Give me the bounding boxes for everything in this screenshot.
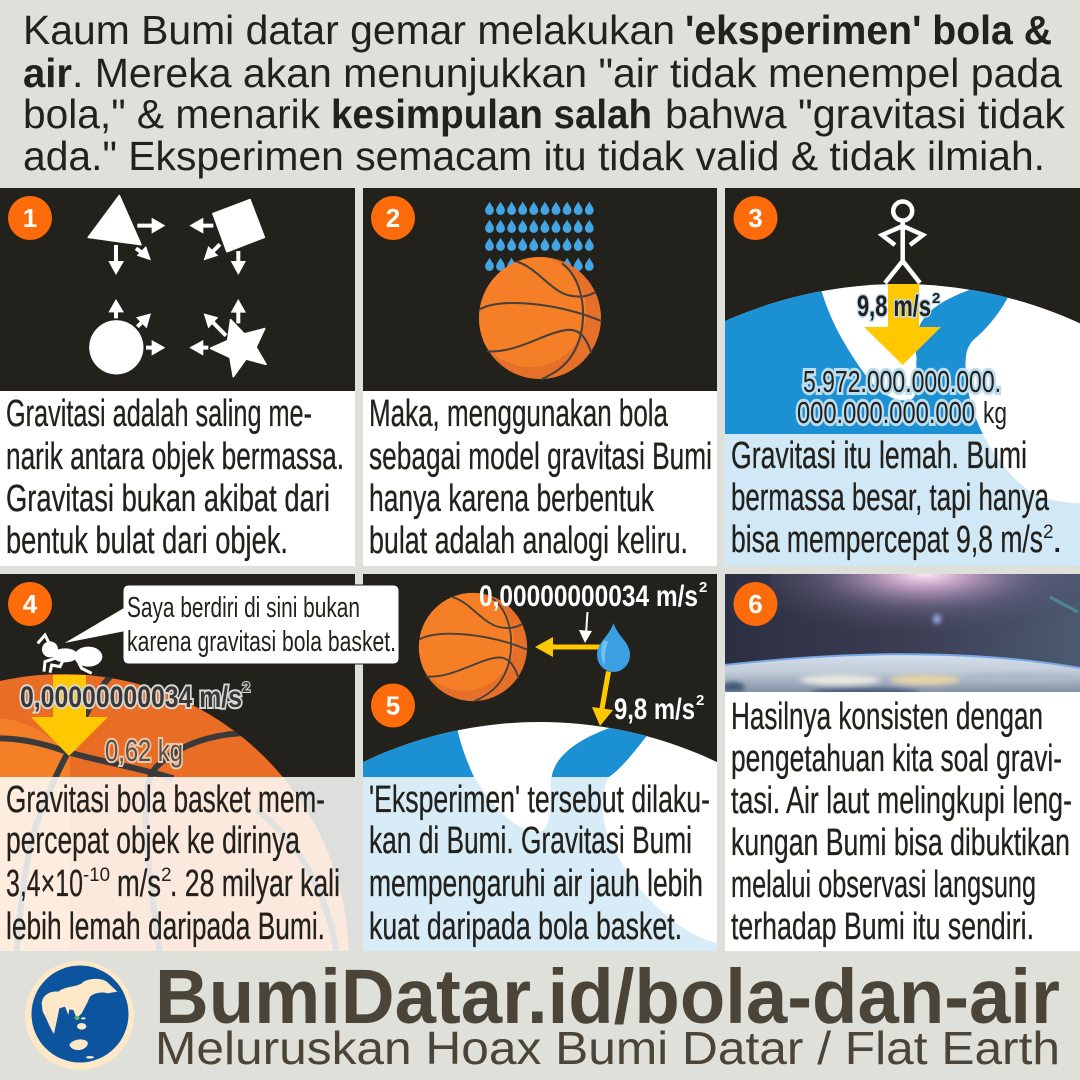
panel 4: ant on basketball xyxy=(0,574,399,960)
panel 6: photo of earth from space xyxy=(721,574,1080,951)
text block 6 xyxy=(731,696,1072,948)
title xyxy=(23,7,1065,179)
overlay xyxy=(725,434,1080,566)
title: bahwa "gravitasi tidak xyxy=(665,91,1065,137)
earth illustration xyxy=(363,715,717,955)
label: earth mass: 000.000.000.000 xyxy=(797,395,975,430)
arrow: toward earth xyxy=(592,671,613,726)
footer url: BumiDatar.id/bola-dan-air xyxy=(155,954,1060,1040)
text block 1 xyxy=(6,393,344,562)
label: earth mass: 5.972.000.000.000. xyxy=(803,364,1001,399)
callout: ant speech bubble xyxy=(62,585,399,664)
text block 4: -10 xyxy=(83,865,110,886)
text block 1: Gravitasi bukan akibat dari xyxy=(6,478,330,520)
label: earth mass xyxy=(797,364,1007,430)
title: . Mereka akan menunjukkan "air tidak menempel pada xyxy=(72,50,1062,96)
overlay xyxy=(0,777,355,951)
label: 9,8 m/s2: 2 xyxy=(932,290,940,307)
badge 6 xyxy=(734,582,778,626)
footer tagline: Meluruskan Hoax Bumi Datar / Flat Earth xyxy=(155,1022,1060,1074)
panel 3: earth gravity xyxy=(725,188,1080,570)
text block 2: hanya karena berbentuk xyxy=(369,478,655,520)
text block 4 xyxy=(6,779,340,948)
text block 1: narik antara objek bermassa. xyxy=(6,436,344,478)
text block 5: 'Eksperimen' tersebut dilaku- xyxy=(369,779,710,821)
badge 4: 4 xyxy=(23,589,38,619)
label: earth acceleration: 2 xyxy=(696,692,704,709)
label: earth acceleration: 9,8 m/s xyxy=(614,693,695,726)
badge 6: 6 xyxy=(748,589,763,619)
badge 1: 1 xyxy=(23,203,37,233)
text block 5: kuat daripada bola basket. xyxy=(369,906,682,948)
title: ada." Eksperimen semacam itu tidak valid & tidak ilmiah. xyxy=(23,133,1045,179)
label: ball acceleration: 0,00000000034 m/s xyxy=(479,580,698,613)
text block 3: 2 xyxy=(1043,522,1054,543)
text block 2: bulat adalah analogi keliru. xyxy=(369,520,688,562)
label: earth mass: kg xyxy=(983,395,1007,430)
badge 3: 3 xyxy=(748,203,763,233)
panel 5: drop between ball and earth xyxy=(363,574,717,955)
badge 3 xyxy=(734,196,778,240)
panel 1: shapes and gravity xyxy=(0,188,355,566)
arrow: toward ball xyxy=(535,637,601,657)
icon: ant xyxy=(38,635,102,673)
arrow: gravity xyxy=(31,675,108,756)
callout: ant speech bubble: Saya berdiri di sini bukan xyxy=(127,592,360,624)
text block 2: sebagai model gravitasi Bumi xyxy=(369,436,712,478)
title: bola," & menarik xyxy=(23,91,320,137)
badge 5 xyxy=(371,684,415,728)
photo: earth horizon xyxy=(721,574,1080,696)
overlay xyxy=(363,777,717,951)
text block 5: kan di Bumi. Gravitasi Bumi xyxy=(369,820,692,862)
text block 3 xyxy=(731,435,1063,561)
title: 'eksperimen' bola & xyxy=(685,7,1052,53)
icon: rain drops xyxy=(485,202,594,271)
arrow: gravity xyxy=(864,284,941,365)
badge 2 xyxy=(371,196,415,240)
label: ball acceleration: 0,00000000034 m/s xyxy=(20,681,242,714)
icon: shapes with arrows xyxy=(88,196,266,377)
icon: basketball xyxy=(415,591,527,701)
basketball surface xyxy=(0,660,355,960)
text block 4: percepat objek ke dirinya xyxy=(6,820,301,862)
text block 4: 3,4×10 xyxy=(6,863,83,905)
text block 2: Maka, menggunakan bola xyxy=(369,393,669,435)
title: Kaum Bumi datar gemar melakukan xyxy=(23,7,675,53)
title: kesimpulan salah xyxy=(331,91,652,137)
text block 5: mempengaruhi air jauh lebih xyxy=(369,863,703,905)
label: ball acceleration: 2 xyxy=(242,679,250,696)
badge 1 xyxy=(8,196,52,240)
icon: basketball xyxy=(474,255,601,379)
text block 1: Gravitasi adalah saling me- xyxy=(6,393,312,435)
panel 2: water drops on basketball xyxy=(363,188,717,566)
text block 4: . 28 milyar kali xyxy=(170,863,340,905)
icon: globe logo xyxy=(25,961,134,1070)
title: air xyxy=(23,50,72,96)
text block 4: m/s xyxy=(117,863,161,905)
label: 9,8 m/s2: 9,8 m/s xyxy=(857,290,931,323)
badge 5: 5 xyxy=(386,690,400,720)
text block 5 xyxy=(369,779,710,948)
label: ball mass: 0,62 kg xyxy=(105,733,183,768)
text block 1: bentuk bulat dari objek. xyxy=(6,520,288,562)
icon: water drop xyxy=(597,623,630,672)
label: ball acceleration: 2 xyxy=(699,579,707,596)
icon: stick figure xyxy=(882,202,923,283)
badge 4 xyxy=(8,582,52,626)
text block 2 xyxy=(369,393,712,562)
text block 4: Gravitasi bola basket mem- xyxy=(6,779,325,821)
badge 2: 2 xyxy=(386,203,400,233)
arrow: label pointer xyxy=(579,612,592,643)
text block 3: . xyxy=(1052,519,1063,561)
text block 4: 2 xyxy=(161,865,172,886)
callout: ant speech bubble: karena gravitasi bola basket. xyxy=(127,626,396,658)
earth illustration xyxy=(725,270,1080,570)
text block 4: lebih lemah daripada Bumi. xyxy=(6,906,325,948)
